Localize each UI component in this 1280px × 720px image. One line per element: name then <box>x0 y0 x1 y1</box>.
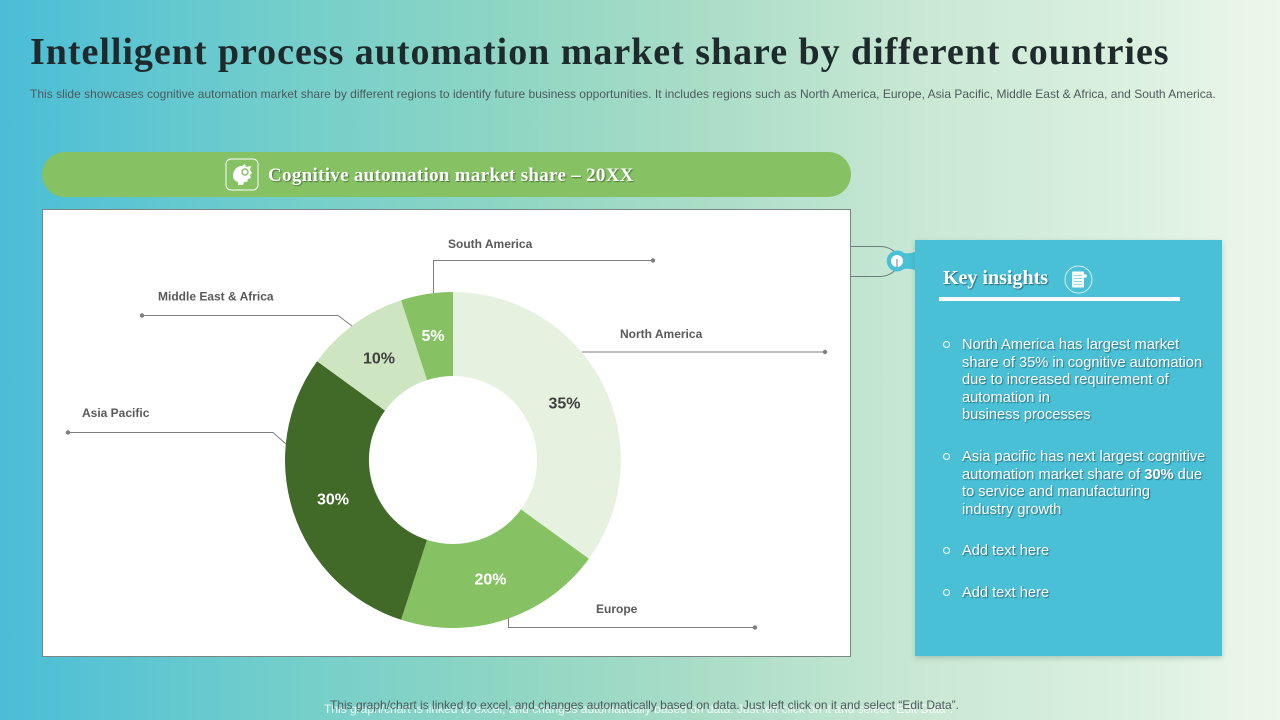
category labels <box>82 237 703 616</box>
icon: notebook <box>1064 266 1092 294</box>
footnote: dark layer: This graph/chart is linked to excel, and changes automatically based on data. Just left click on it and select “Edit Data”. <box>330 698 959 712</box>
leader lines <box>68 260 825 628</box>
bullet 1: due to increased requirement of <box>962 372 1169 388</box>
bullet 1: share of 35% in cognitive automation <box>962 354 1202 370</box>
value labels: 35% <box>548 396 581 412</box>
category labels: North America <box>620 327 703 341</box>
panel: key insights <box>915 240 1222 656</box>
insight list <box>943 337 1206 601</box>
bullet 1: business processes <box>962 407 1091 423</box>
bullet 1 <box>943 337 1203 424</box>
bullet 2: Asia pacific has next largest cognitive <box>962 449 1205 465</box>
subtitle: This slide showcases cognitive automation market share by different regions to identify future business opportunities. It includes regions such as North America, Europe, Asia Pacific, Middle East & Africa, and South America. <box>30 87 1216 101</box>
category labels: Middle East & Africa <box>158 290 274 304</box>
title: Intelligent process automation market share by different countries <box>30 31 1170 73</box>
panel: chart <box>42 209 851 657</box>
bullet 2: automation market share of 30% due <box>962 466 1202 482</box>
heading underline <box>939 297 1180 301</box>
category labels: Asia Pacific <box>82 406 150 420</box>
segment: Middle East and Africa 10% <box>317 300 427 411</box>
bullet 3: Add text here <box>962 543 1049 559</box>
banner <box>42 152 851 197</box>
bullet 2 <box>943 449 1206 518</box>
value labels <box>317 328 581 588</box>
value labels: 30% <box>317 492 349 508</box>
bullet 2: industry growth <box>962 502 1061 518</box>
footnote: white layer: This graph/chart is linked to excel, and changes automatically based on data. Just left click on it and select “Edit Data”. <box>324 702 953 716</box>
key insights heading: Key insights <box>943 267 1048 289</box>
bullet 1: North America has largest market <box>962 337 1179 353</box>
value labels: 10% <box>363 350 395 368</box>
category labels: Europe <box>596 602 638 616</box>
icon: cognitive head <box>226 158 258 190</box>
value labels: 5% <box>421 328 445 345</box>
segment: Europe 20% <box>401 509 589 628</box>
bullet 1: automation in <box>962 390 1050 406</box>
segment: South America 5% <box>401 292 453 380</box>
bullet 4: Add text here <box>962 585 1049 601</box>
leader line dots <box>66 258 827 630</box>
segment: North America 35% <box>453 292 621 559</box>
bullet 2: to service and manufacturing <box>962 484 1150 500</box>
segment: Asia Pacific 30% <box>285 361 427 620</box>
connector <box>851 246 915 276</box>
category labels: South America <box>448 237 533 251</box>
value labels: 20% <box>474 572 507 588</box>
banner heading: Cognitive automation market share – 20XX <box>268 165 634 186</box>
